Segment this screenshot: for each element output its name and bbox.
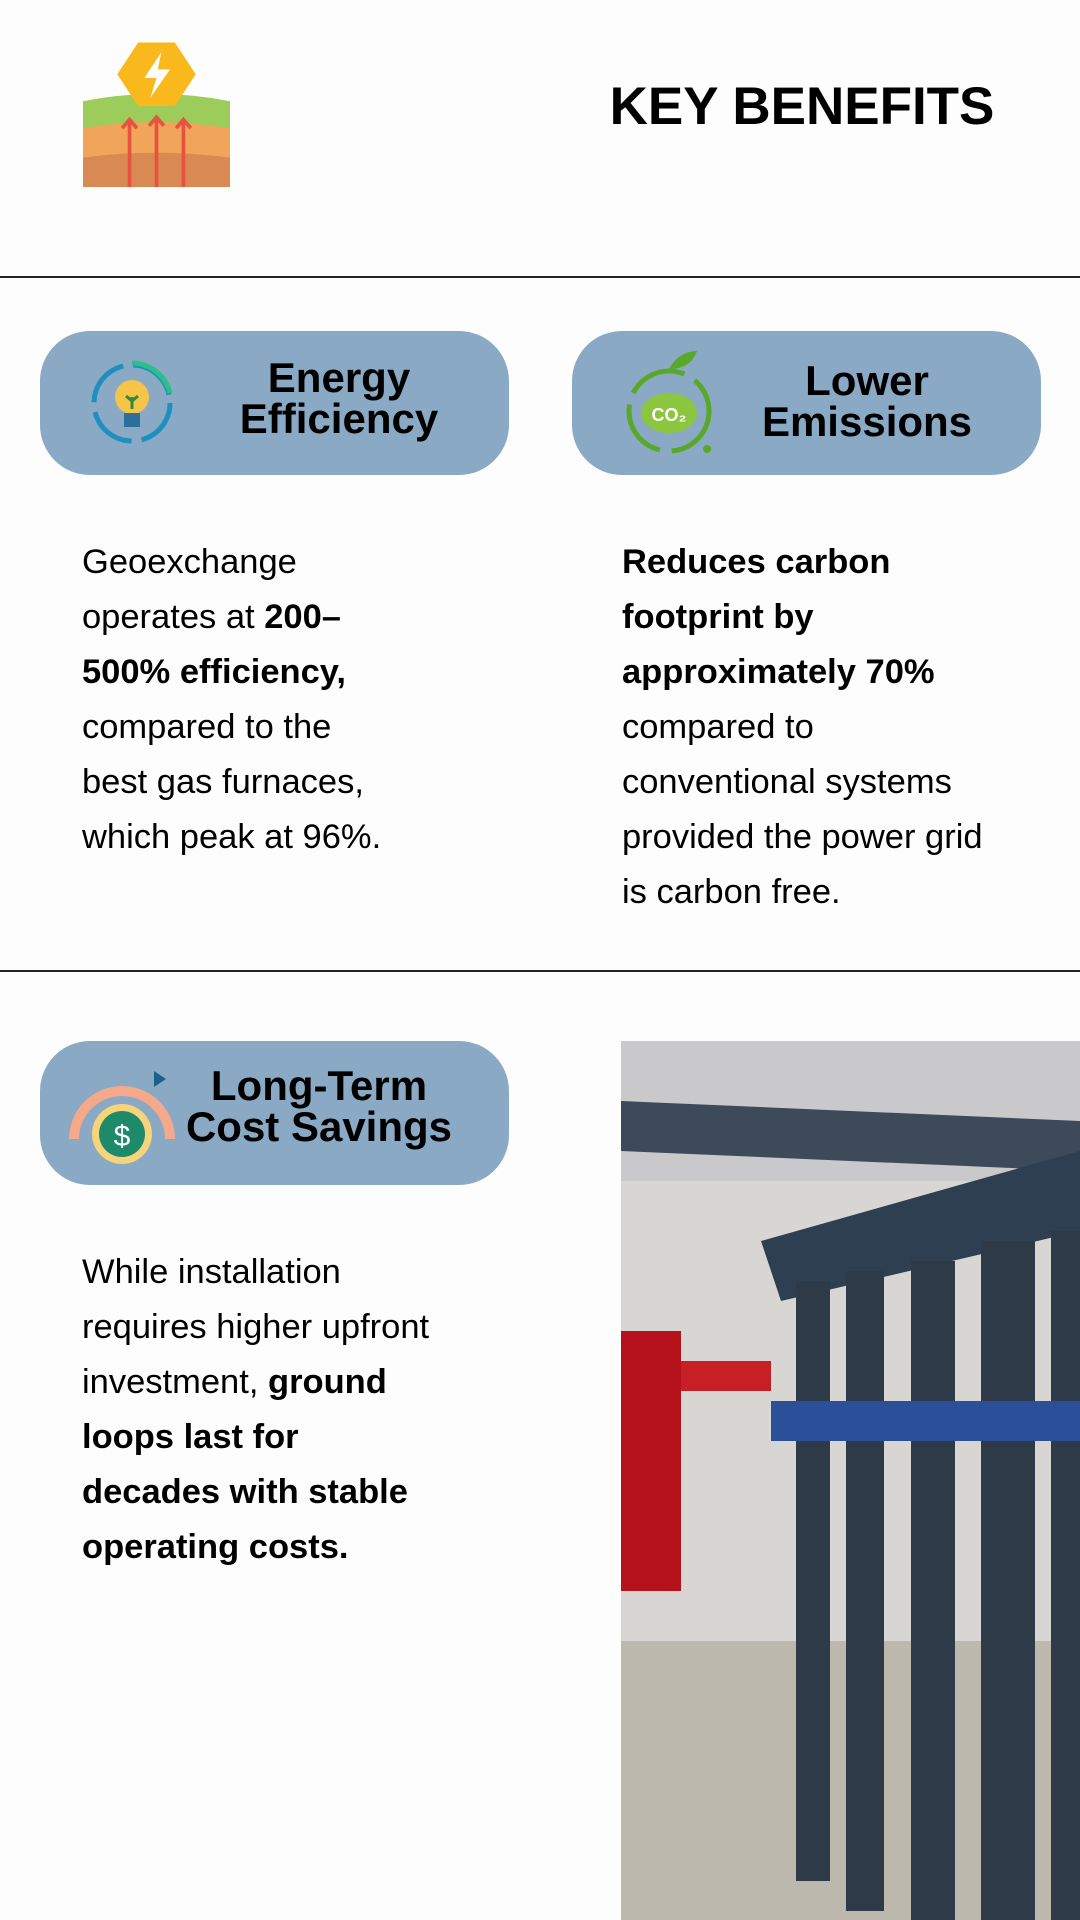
text: lower emissions: approximately 70% <box>622 653 935 691</box>
heading: Energy <box>268 354 410 401</box>
text: cost savings <box>82 1253 429 1566</box>
heading: Lower <box>805 357 929 404</box>
icon: dollar gauge <box>69 1071 175 1164</box>
text: energy efficiency: compared to the <box>82 708 331 746</box>
icon: co2 leaf: CO₂ <box>652 405 686 425</box>
text: lower emissions <box>622 543 983 911</box>
text: cost savings: decades with stable <box>82 1473 408 1511</box>
text: cost savings: While installation <box>82 1253 341 1291</box>
text: lower emissions: is carbon free. <box>622 873 841 911</box>
icon: co2 leaf <box>626 351 712 454</box>
heading <box>762 357 972 445</box>
text: lower emissions: conventional systems <box>622 763 952 801</box>
heading: Cost Savings <box>186 1103 452 1150</box>
heading: Emissions <box>762 398 972 445</box>
text: lower emissions: footprint by <box>622 598 814 636</box>
text: lower emissions: provided the power grid <box>622 818 983 856</box>
panel: lower emissions <box>572 331 1041 475</box>
text: energy efficiency: best gas furnaces, <box>82 763 364 801</box>
text: cost savings: loops last for <box>82 1418 299 1456</box>
text: energy efficiency: Geoexchange <box>82 543 297 581</box>
icon: bulb cycle <box>92 360 172 444</box>
text: cost savings: requires higher upfront <box>82 1308 429 1346</box>
heading: Long-Term <box>211 1062 427 1109</box>
text: energy efficiency <box>82 543 381 856</box>
text: lower emissions: Reduces carbon <box>622 543 890 581</box>
text: energy efficiency: which peak at 96%. <box>82 818 381 856</box>
heading: Efficiency <box>240 395 438 442</box>
panel: cost savings <box>40 1041 509 1185</box>
text: cost savings: investment, ground <box>82 1363 387 1401</box>
title: KEY BENEFITS <box>610 77 994 136</box>
heading <box>186 1062 452 1150</box>
photo: pipes <box>621 1041 1080 1920</box>
text: energy efficiency: operates at 200– <box>82 598 341 636</box>
text: cost savings: operating costs. <box>82 1528 348 1566</box>
text: lower emissions: compared to <box>622 708 814 746</box>
panel: energy efficiency <box>40 331 509 475</box>
icon: geothermal energy <box>83 42 230 187</box>
icon: dollar gauge: $ <box>114 1120 131 1153</box>
text: energy efficiency: 500% efficiency, <box>82 653 346 691</box>
heading <box>240 354 438 442</box>
